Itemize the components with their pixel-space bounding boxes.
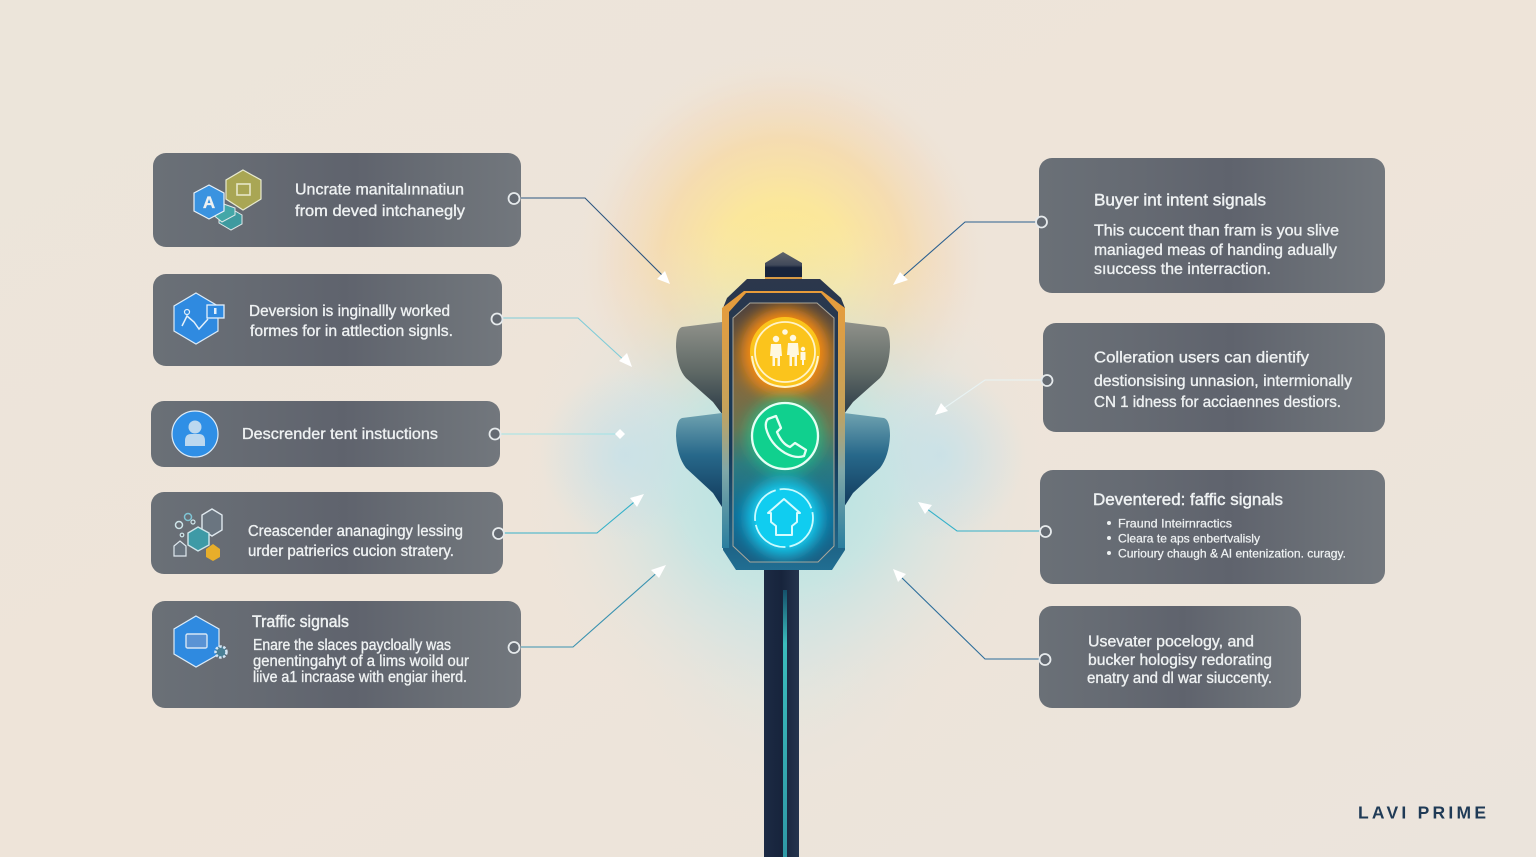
text — [248, 523, 463, 560]
light: green — [752, 403, 818, 469]
text: bucker hologisy redorating — [1088, 652, 1272, 669]
text: sıuccess the interraction. — [1094, 261, 1271, 278]
connector dot — [1042, 375, 1052, 386]
connector: left 1 — [521, 198, 670, 284]
text: Buyer int intent signals — [1094, 192, 1266, 210]
icon: people — [770, 329, 806, 366]
connector dot — [1040, 654, 1050, 665]
panel: left 2 — [153, 274, 502, 366]
text — [1094, 192, 1339, 278]
text — [249, 303, 453, 340]
glows — [741, 308, 829, 556]
connector dot — [508, 642, 520, 653]
pole — [764, 565, 799, 857]
cap — [765, 252, 802, 279]
text: destionsising unnasion, intermionally — [1094, 373, 1352, 390]
text: Traffic signals — [252, 613, 349, 631]
connector: left 3 — [500, 429, 625, 439]
text: CN 1 idness for acciaennes destiors. — [1094, 394, 1341, 411]
text: Descrender tent instuctions — [242, 426, 438, 443]
text: Creascender ananagingy lessing — [248, 523, 463, 540]
text: maniaged meas of handing adually — [1094, 242, 1337, 259]
text: formes for in attlection signls. — [250, 323, 453, 340]
logo: LAVI PRIME — [1358, 802, 1486, 822]
housing — [722, 279, 845, 570]
text: Deventered: faffic signals — [1093, 491, 1283, 509]
panel: right 3 — [1040, 470, 1385, 584]
text: urder patrierics cucion stratery. — [248, 543, 454, 560]
text: Enare the slaces paycloally was — [253, 637, 451, 654]
text: from deved intchanegly — [295, 203, 465, 220]
connector: right 1 — [893, 222, 1039, 285]
icon: blue hexagon — [174, 293, 224, 344]
icon: house — [768, 499, 800, 535]
text: Deversion is inginallly worked — [249, 303, 450, 320]
text — [1093, 491, 1346, 560]
text: Usevater pocelogy, and — [1088, 634, 1254, 650]
light: yellow — [750, 317, 820, 387]
text: Cleara te aps enbertvalisly — [1118, 532, 1260, 546]
connector: left 4 — [503, 494, 644, 533]
connector dot — [508, 193, 520, 204]
text: This cuccent than fram is you slive — [1094, 222, 1339, 240]
icon: hexagons: A — [203, 193, 215, 212]
icon: hexagons — [194, 170, 261, 230]
light: blue — [755, 489, 813, 547]
text: enatry and dl war siuccenty. — [1087, 670, 1272, 687]
icon: hexagon cluster — [174, 509, 222, 561]
icon: card hexagon — [174, 616, 226, 667]
traffic light — [676, 252, 890, 570]
icon: phone — [766, 416, 806, 457]
panel: right 4 — [1039, 606, 1301, 708]
panel: left 4 — [151, 492, 504, 574]
text: Fraund Inteirnractics — [1118, 516, 1232, 530]
connector dot — [493, 528, 504, 539]
text — [1094, 350, 1352, 411]
text — [252, 613, 469, 686]
panel: right 2 — [1042, 323, 1385, 432]
connector dot — [492, 314, 502, 324]
panel: left 1 — [153, 153, 521, 247]
text — [1087, 634, 1272, 687]
connector dot — [1036, 216, 1047, 228]
connector dot — [490, 428, 500, 440]
text: Uncrate manitalınnatiun — [295, 182, 464, 198]
text: liive a1 incraase with engiar iherd. — [253, 669, 467, 686]
panel: left 3 — [151, 401, 500, 467]
text: Colleration users can dientify — [1094, 350, 1309, 366]
text: Curioury chaugh & AI entenization. curagy. — [1118, 546, 1346, 560]
connector: right 4 — [893, 569, 1040, 659]
text: genentingahyt of a lims woild our — [253, 653, 469, 670]
side visors — [676, 322, 890, 507]
connector: right 3 — [918, 502, 1040, 531]
connector: left 5 — [521, 565, 666, 647]
text — [295, 182, 465, 220]
panel: right 1 — [1036, 158, 1385, 293]
connector dot — [1040, 526, 1051, 537]
connector: left 2 — [502, 318, 632, 367]
connector: right 2 — [935, 380, 1043, 415]
panel: left 5 — [152, 601, 521, 708]
icon: user — [172, 411, 218, 457]
